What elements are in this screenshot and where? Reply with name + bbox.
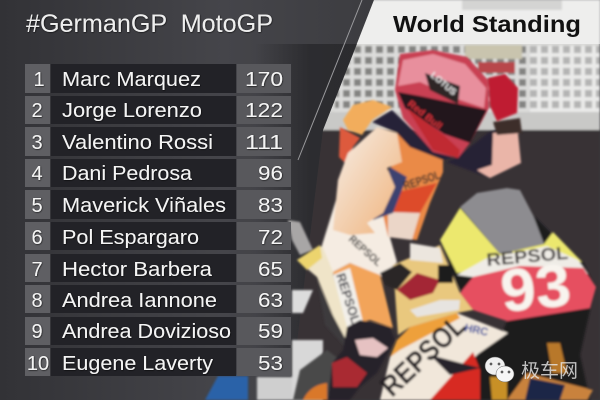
row 1: 1 xyxy=(33,69,45,91)
rider arm and glove xyxy=(447,74,522,178)
row 9: 59 xyxy=(258,321,283,343)
row 5: 83 xyxy=(258,195,283,217)
rider torso xyxy=(333,100,453,240)
row 6 xyxy=(25,222,291,250)
row 4: 4 xyxy=(31,163,43,185)
hand on handlebar xyxy=(380,243,460,317)
sponsor text on bike and rider: REPSOL xyxy=(402,168,442,193)
row 1 xyxy=(25,64,291,93)
row 7: 65 xyxy=(258,259,283,281)
row 7: 7 xyxy=(31,259,43,281)
row 2: 122 xyxy=(245,100,283,122)
motorcycle tail xyxy=(297,243,348,350)
sponsor text on bike and rider: HRC xyxy=(463,322,489,339)
sponsor text on bike and rider: REPSOL xyxy=(375,309,472,400)
row 7: Hector Barbera xyxy=(62,259,213,281)
row 3: 3 xyxy=(31,132,43,154)
row 6: 72 xyxy=(258,227,283,249)
icon: chat bubbles watermark xyxy=(485,357,514,382)
row 9 xyxy=(25,317,291,345)
row 2: 2 xyxy=(31,100,43,122)
rider leg and boot xyxy=(322,200,397,400)
row 9: 9 xyxy=(31,321,43,343)
row 5: Maverick Viñales xyxy=(62,195,226,217)
row 10: Eugene Laverty xyxy=(62,353,213,375)
row 10: 53 xyxy=(258,353,283,375)
row 10: 10 xyxy=(27,353,49,375)
row 1: 170 xyxy=(245,69,283,91)
row 8 xyxy=(25,285,291,313)
row 4: Dani Pedrosa xyxy=(62,163,193,185)
rear wheel xyxy=(293,350,340,400)
left dark slanted panel xyxy=(0,0,374,400)
sponsor text on bike and rider: REPSOL xyxy=(486,243,569,270)
motorcycle fairing xyxy=(380,188,596,400)
sponsor text on bike and rider: LOTUS xyxy=(429,70,459,97)
row 4: 96 xyxy=(258,163,283,185)
row 3: 111 xyxy=(245,132,283,154)
title band: World Standing xyxy=(357,0,600,44)
row 8: Andrea Iannone xyxy=(62,290,217,312)
title band: World Standing: World Standing xyxy=(393,11,581,37)
row 6: 6 xyxy=(31,227,43,249)
sponsor text on bike and rider: REPSOL xyxy=(346,233,384,269)
row 9: Andrea Dovizioso xyxy=(62,321,231,343)
row 3 xyxy=(25,127,291,156)
heading: #GermanGP MotoGP: #GermanGP MotoGP xyxy=(26,10,273,38)
helmet xyxy=(395,50,489,158)
row 10 xyxy=(25,348,291,376)
row 3: Valentino Rossi xyxy=(62,132,213,154)
row 7 xyxy=(25,254,291,282)
row 1: Marc Marquez xyxy=(62,69,201,91)
row 5: 5 xyxy=(31,195,43,217)
row 4 xyxy=(25,159,291,187)
rider and motorcycle photo xyxy=(293,50,596,400)
standings table xyxy=(25,64,291,376)
sponsor text on bike and rider: Red Bull xyxy=(405,99,444,132)
row 2: Jorge Lorenzo xyxy=(62,100,202,122)
row 8: 8 xyxy=(31,290,43,312)
objects behind the table at bottom xyxy=(205,220,323,400)
sponsor text on bike and rider: REPSOL xyxy=(333,271,363,325)
watermark text: 极车网 xyxy=(521,360,578,382)
row 6: Pol Espargaro xyxy=(62,227,199,249)
row 8: 63 xyxy=(258,290,283,312)
sponsor text on bike and rider xyxy=(333,70,574,400)
row 5 xyxy=(25,190,291,219)
sponsor text on bike and rider: 93 xyxy=(497,251,574,325)
row 2 xyxy=(25,96,291,124)
